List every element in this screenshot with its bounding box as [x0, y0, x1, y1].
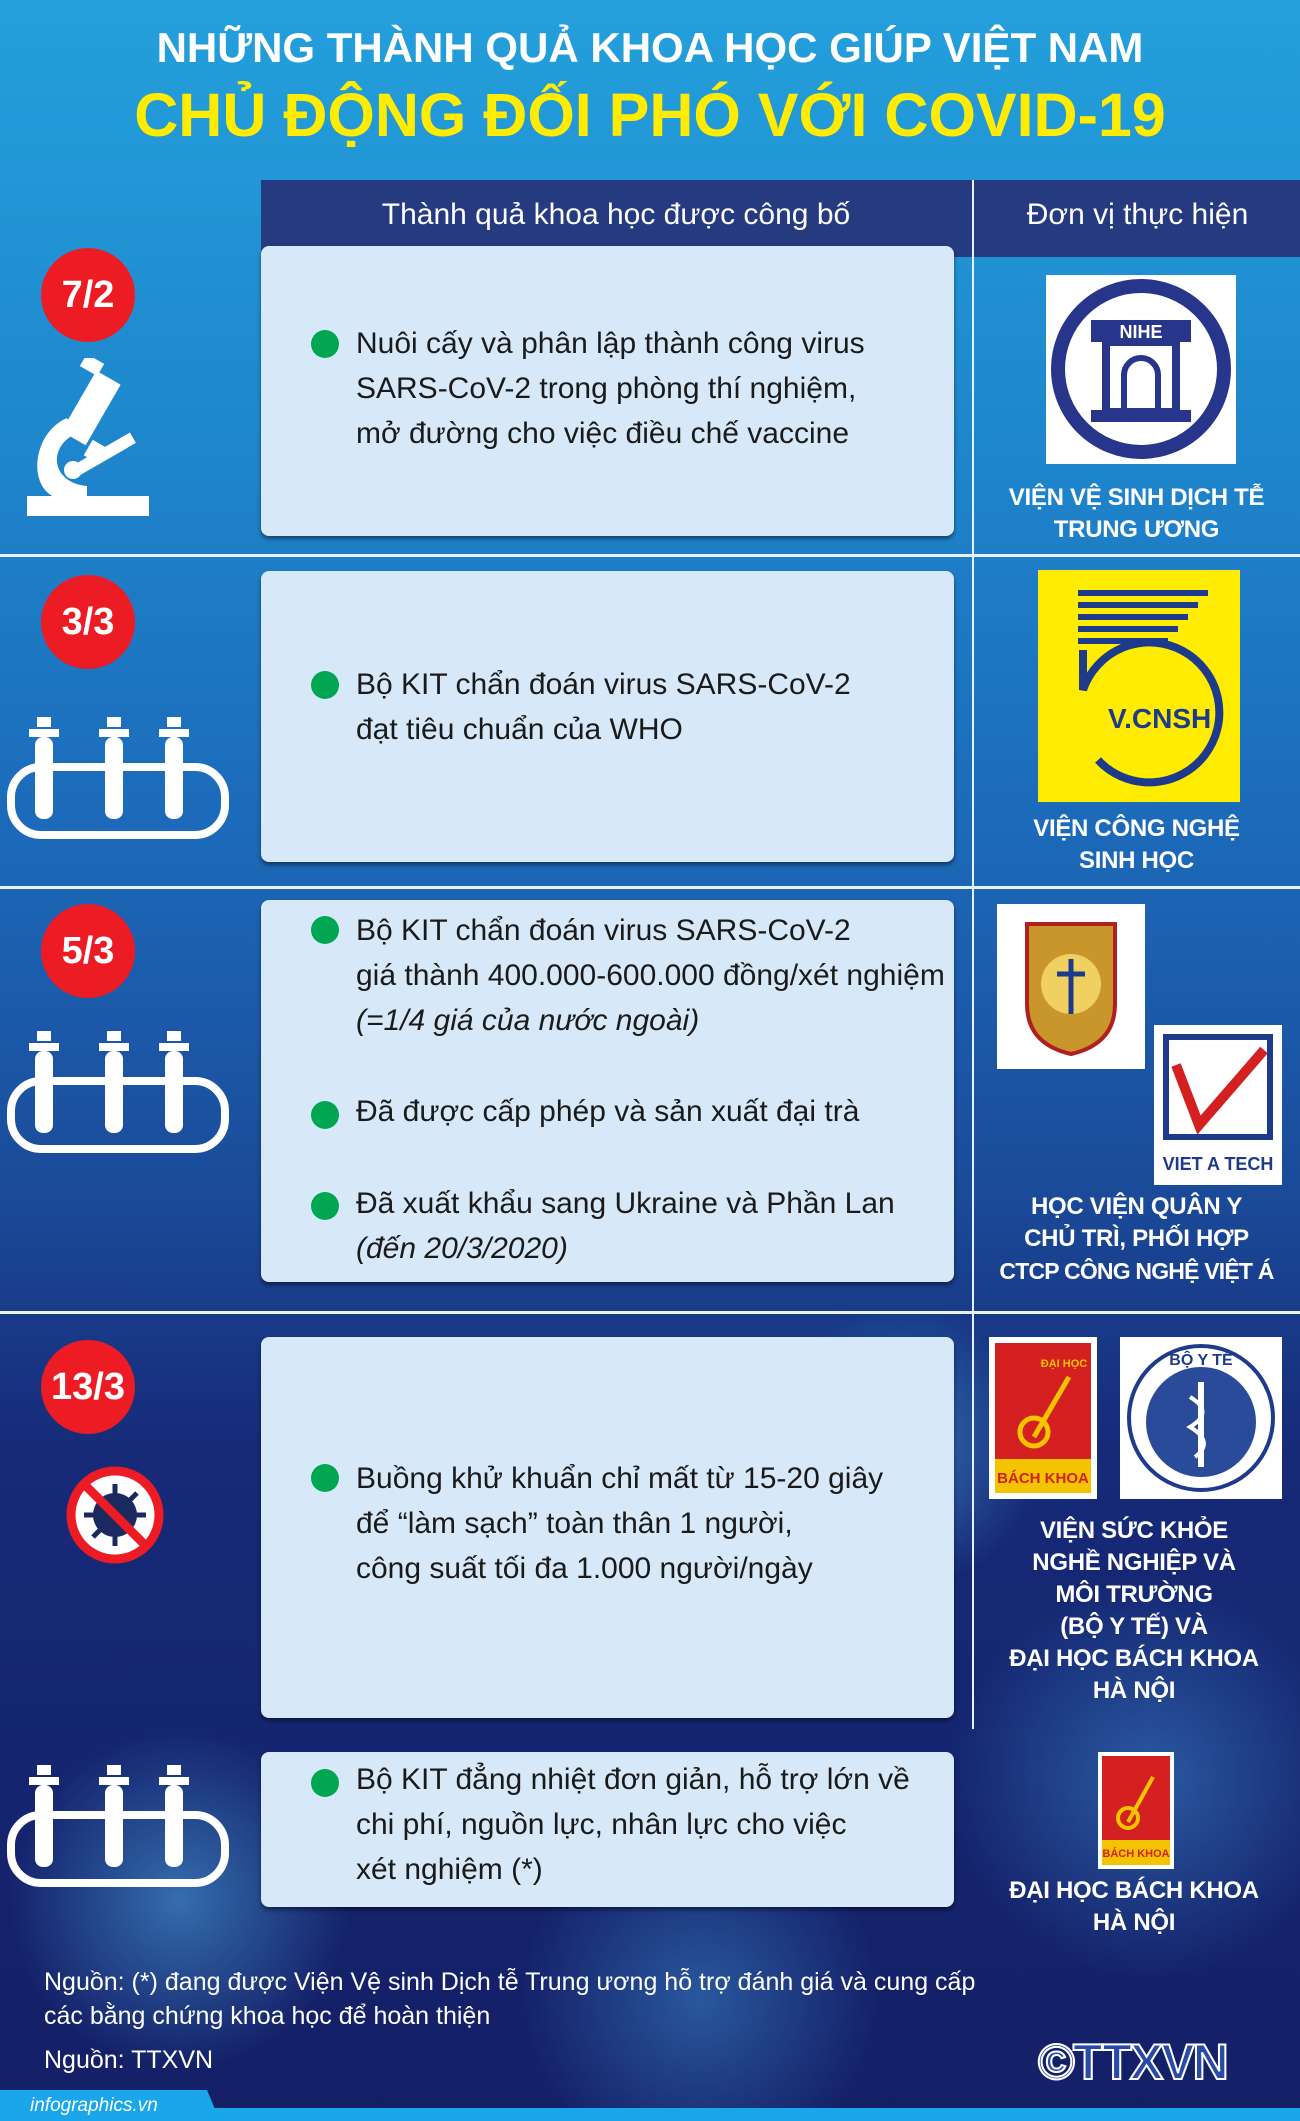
- card 5: [261, 1752, 954, 1907]
- logo: Bach Khoa small: BÁCH KHOA: [1102, 1847, 1170, 1860]
- org: health institute & Bach Khoa: ĐẠI HỌC BÁCH KHOA: [1009, 1645, 1259, 1672]
- card 3: giá thành 400.000-600.000 đồng/xét nghiệm: [356, 959, 945, 992]
- org: Bach Khoa: [1009, 1876, 1259, 1936]
- logo: TTXVN: ©TTXVN: [1038, 2034, 1227, 2090]
- logo: V.CNSH: [1038, 570, 1240, 802]
- card 5: xét nghiệm (*): [356, 1853, 543, 1886]
- card 5: Bộ KIT đẳng nhiệt đơn giản, hỗ trợ lớn về: [356, 1763, 910, 1796]
- logo: military medical academy: [997, 904, 1145, 1069]
- logo: Bach Khoa: BÁCH KHOA: [997, 1470, 1089, 1487]
- org: military academy & Viet A: CHỦ TRÌ, PHỐI HỢP: [1024, 1225, 1249, 1252]
- logo: NIHE: NIHE: [1119, 322, 1163, 342]
- card 4: [261, 1337, 954, 1718]
- card 3: [261, 900, 954, 1282]
- source notes: các bằng chứng khoa học để hoàn thiện: [44, 2002, 490, 2030]
- icon: test tube rack: [7, 717, 229, 839]
- source notes: Nguồn: (*) đang được Viện Vệ sinh Dịch tễ Trung ương hỗ trợ đánh giá và cung cấp: [44, 1968, 975, 1996]
- footer tab: infographics.vn: [0, 2090, 214, 2115]
- org: biotech institute: [1033, 814, 1240, 874]
- card 4: Buồng khử khuẩn chỉ mất từ 15-20 giây: [356, 1462, 883, 1495]
- org: Bach Khoa: HÀ NỘI: [1093, 1909, 1175, 1936]
- source notes: [44, 1968, 975, 2074]
- source notes: Nguồn: TTXVN: [44, 2046, 213, 2074]
- org: health institute & Bach Khoa: NGHỀ NGHIỆP VÀ: [1032, 1549, 1236, 1576]
- icon: test tube rack: [7, 1765, 229, 1887]
- card 5: chi phí, nguồn lực, nhân lực cho việc: [356, 1808, 846, 1841]
- org: NIHE: [1008, 483, 1264, 543]
- logo: Viet A Tech: VIET A TECH: [1163, 1154, 1273, 1174]
- org: biotech institute: VIỆN CÔNG NGHỆ: [1033, 815, 1240, 842]
- bottom strip: [0, 2108, 1300, 2121]
- card 4: để “làm sạch” toàn thân 1 người,: [356, 1507, 793, 1540]
- icon: test tube rack: [7, 1031, 229, 1153]
- org: health institute & Bach Khoa: [1009, 1516, 1259, 1704]
- card 3: Đã được cấp phép và sản xuất đại trà: [356, 1095, 859, 1128]
- row 1 date: 7/2: [62, 274, 114, 316]
- logo: Bach Khoa small: [1098, 1752, 1174, 1869]
- logo: Viet A Tech: [1154, 1025, 1282, 1185]
- logo: Ministry of Health: BỘ Y TẾ: [1169, 1350, 1233, 1369]
- header: achievements: Thành quả khoa học được công bố: [382, 198, 850, 231]
- org: biotech institute: SINH HỌC: [1079, 847, 1194, 874]
- row 2 date: 3/3: [62, 601, 114, 643]
- org: military academy & Viet A: HỌC VIỆN QUÂN Y: [1031, 1193, 1242, 1220]
- card 2: đạt tiêu chuẩn của WHO: [356, 713, 683, 746]
- card 1: SARS-CoV-2 trong phòng thí nghiệm,: [356, 372, 856, 405]
- title line 1: NHỮNG THÀNH QUẢ KHOA HỌC GIÚP VIỆT NAM: [157, 24, 1143, 71]
- logo: Bach Khoa: ĐẠI HỌC: [1041, 1358, 1087, 1370]
- row 1 date: [41, 248, 135, 342]
- icon: no virus: [66, 1466, 164, 1564]
- org: health institute & Bach Khoa: VIỆN SỨC KHỎE: [1040, 1517, 1228, 1544]
- org: health institute & Bach Khoa: (BỘ Y TẾ) VÀ: [1060, 1613, 1208, 1640]
- logo: Ministry of Health: [1120, 1337, 1282, 1499]
- org: NIHE: TRUNG ƯƠNG: [1054, 516, 1219, 543]
- row 3 date: 5/3: [62, 930, 114, 972]
- logo: V.CNSH: V.CNSH: [1108, 703, 1211, 734]
- logo: NIHE: [1046, 275, 1236, 464]
- card 2: Bộ KIT chẩn đoán virus SARS-CoV-2: [356, 668, 851, 701]
- card 2: [261, 571, 954, 862]
- header bar: [261, 180, 1300, 257]
- org: health institute & Bach Khoa: MÔI TRƯỜNG: [1055, 1581, 1213, 1608]
- card 3: Đã xuất khẩu sang Ukraine và Phần Lan: [356, 1187, 895, 1220]
- logo: Bach Khoa: [989, 1337, 1097, 1499]
- row 2 date: [41, 575, 135, 669]
- card 3: (=1/4 giá của nước ngoài): [356, 1004, 699, 1037]
- icon: microscope: [27, 358, 149, 516]
- card 1: Nuôi cấy và phân lập thành công virus: [356, 327, 865, 360]
- row 4 date: 13/3: [51, 1366, 125, 1408]
- card 1: mở đường cho việc điều chế vaccine: [356, 417, 849, 450]
- row 4 date: [41, 1340, 135, 1434]
- title: [134, 24, 1166, 149]
- org: Bach Khoa: ĐẠI HỌC BÁCH KHOA: [1009, 1877, 1259, 1904]
- header: organization: Đơn vị thực hiện: [1027, 198, 1248, 231]
- card 3: (đến 20/3/2020): [356, 1232, 568, 1265]
- card 3: Bộ KIT chẩn đoán virus SARS-CoV-2: [356, 914, 851, 947]
- org: military academy & Viet A: CTCP CÔNG NGHỆ VIỆT Á: [999, 1258, 1274, 1284]
- footer tab: infographics.vn: infographics.vn: [30, 2095, 158, 2116]
- org: military academy & Viet A: [999, 1192, 1274, 1284]
- card 1: [261, 246, 954, 536]
- card 4: công suất tối đa 1.000 người/ngày: [356, 1552, 813, 1585]
- org: NIHE: VIỆN VỆ SINH DỊCH TỄ: [1009, 484, 1264, 511]
- org: health institute & Bach Khoa: HÀ NỘI: [1093, 1677, 1175, 1704]
- title line 2: CHỦ ĐỘNG ĐỐI PHÓ VỚI COVID-19: [134, 81, 1166, 149]
- row 3 date: [41, 904, 135, 998]
